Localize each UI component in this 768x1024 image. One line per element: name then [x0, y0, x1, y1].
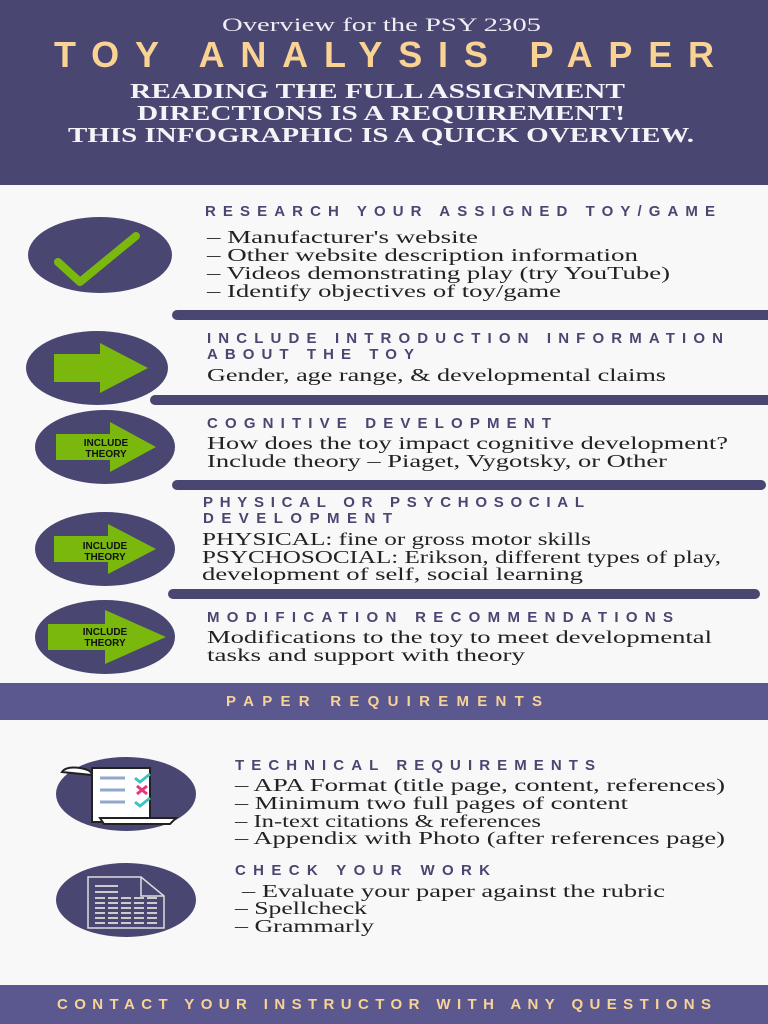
panel: technical requirements: – APA Format (title page, content, references): [233, 775, 725, 795]
header notice: DIRECTIONS IS A REQUIREMENT!: [137, 101, 625, 125]
footer: CONTACT YOUR INSTRUCTOR WITH ANY QUESTIONS: [57, 996, 711, 1013]
panel: research: – Videos demonstrating play (try YouTube): [205, 263, 670, 283]
icon: include theory arrow: THEORY: [84, 552, 126, 563]
panel: research: RESEARCH YOUR ASSIGNED TOY/GAME: [205, 203, 715, 220]
icon: document: [56, 863, 196, 937]
panel: check your work: – Evaluate your paper against the rubric: [240, 881, 665, 901]
band: paper requirements: PAPER REQUIREMENTS: [226, 693, 542, 710]
icon: include theory arrow: THEORY: [85, 449, 127, 460]
panel: research: [28, 203, 715, 301]
panel: modification: [35, 600, 712, 674]
panel: research: – Manufacturer's website: [205, 227, 478, 247]
panel: physical/psychosocial: PHYSICAL OR PSYCHOSOCIAL: [203, 494, 584, 511]
panel: physical/psychosocial: [35, 494, 721, 586]
panel: technical requirements: [56, 757, 725, 848]
footer: [0, 985, 768, 1024]
header notice: READING THE FULL ASSIGNMENT: [130, 79, 625, 103]
header notice: [68, 79, 694, 147]
icon: include theory arrow: INCLUDE: [83, 627, 128, 638]
panel: introduction: Gender, age range, & developmental claims: [207, 365, 666, 385]
icon: checklist scroll: [56, 757, 196, 831]
panel: cognitive: COGNITIVE DEVELOPMENT: [207, 415, 551, 432]
subtitle: Overview for the PSY 2305: [222, 15, 541, 36]
panel: check your work: – Spellcheck: [234, 898, 367, 918]
panel: introduction: ABOUT THE TOY: [207, 346, 414, 363]
icon: include theory arrow: INCLUDE: [84, 438, 129, 449]
panel: modification: MODIFICATION RECOMMENDATIONS: [207, 609, 673, 626]
icon: include theory arrow: INCLUDE: [83, 541, 128, 552]
panel: cognitive: How does the toy impact cognitive development?: [207, 433, 728, 453]
panel: check your work: [56, 862, 665, 937]
panel: physical/psychosocial: PSYCHOSOCIAL: Erikson, different types of play,: [202, 547, 721, 567]
panel: technical requirements: – In-text citations & references: [234, 811, 541, 831]
panel: technical requirements: – Appendix with Photo (after references page): [233, 828, 725, 848]
panel: cognitive: [35, 410, 728, 484]
header: [0, 0, 768, 185]
panel: technical requirements: TECHNICAL REQUIREMENTS: [235, 757, 595, 774]
panel: introduction: INCLUDE INTRODUCTION INFORMATION: [207, 330, 723, 347]
icon: arrow: [26, 331, 168, 405]
panel: check your work: CHECK YOUR WORK: [235, 862, 490, 879]
panel: cognitive: Include theory – Piaget, Vygotsky, or Other: [207, 451, 667, 471]
header notice: THIS INFOGRAPHIC IS A QUICK OVERVIEW.: [68, 123, 694, 147]
panel: research: – Other website description information: [205, 245, 638, 265]
icon: include theory arrow: [35, 512, 175, 586]
panel: physical/psychosocial: DEVELOPMENT: [203, 510, 392, 527]
panel: research: – Identify objectives of toy/game: [205, 281, 561, 301]
panel: physical/psychosocial: PHYSICAL: fine or gross motor skills: [202, 529, 591, 549]
panel: modification: Modifications to the toy to meet developmental: [207, 627, 712, 647]
panel: physical/psychosocial: development of self, social learning: [202, 564, 583, 584]
icon: include theory arrow: [35, 600, 175, 674]
band: paper requirements: [0, 683, 768, 720]
panel: introduction: [26, 330, 723, 405]
icon: include theory arrow: THEORY: [84, 638, 126, 649]
title: TOY ANALYSIS PAPER: [54, 34, 714, 75]
panel: modification: tasks and support with theory: [207, 645, 525, 665]
icon: include theory arrow: [35, 410, 175, 484]
icon: checkmark: [28, 217, 172, 293]
panel: technical requirements: – Minimum two full pages of content: [233, 793, 628, 813]
panel: check your work: – Grammarly: [234, 916, 374, 936]
